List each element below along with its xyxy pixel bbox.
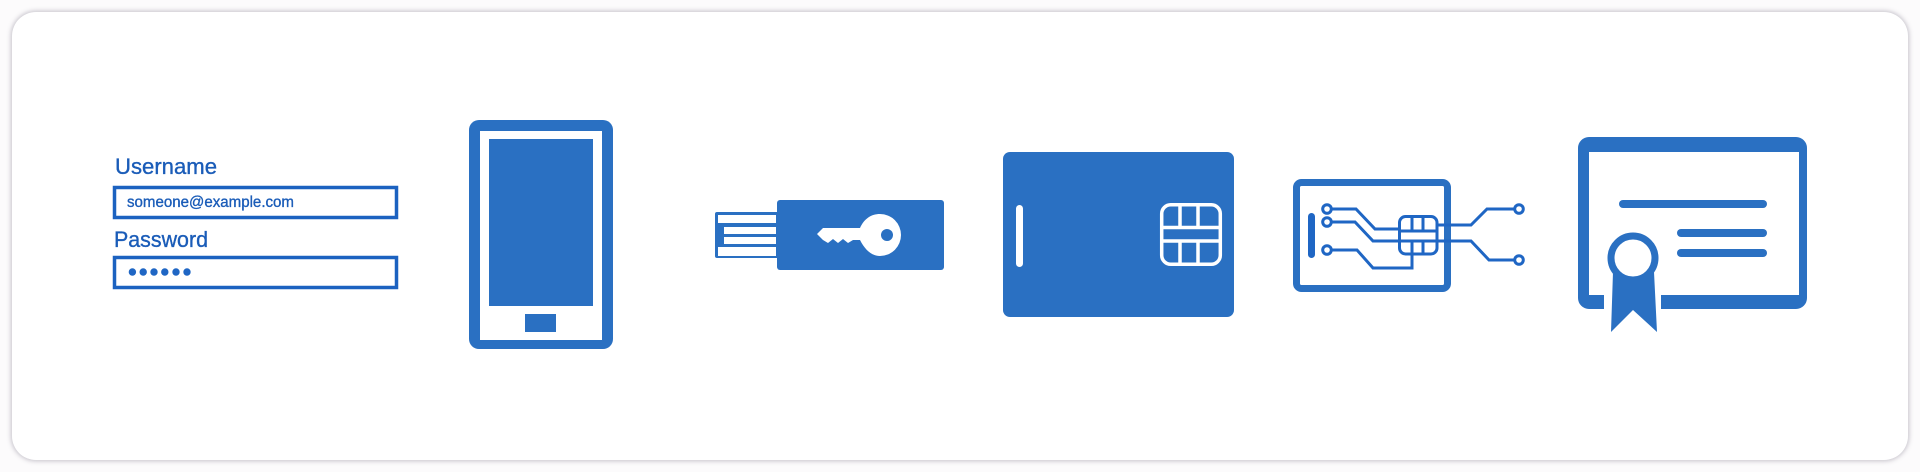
input: username bbox=[114, 188, 396, 218]
icon: smart card bbox=[1003, 152, 1234, 317]
input: username: someone@example.com bbox=[127, 194, 294, 211]
icon: smartphone bbox=[469, 120, 613, 349]
icon: usb security key bbox=[715, 200, 944, 270]
input: password bbox=[114, 258, 396, 288]
username and password form bbox=[114, 154, 396, 288]
label: username: Username bbox=[115, 154, 217, 179]
label: password: Password bbox=[114, 227, 208, 252]
icon: smart card circuit bbox=[1296, 182, 1523, 288]
icon: certificate bbox=[1578, 137, 1807, 332]
